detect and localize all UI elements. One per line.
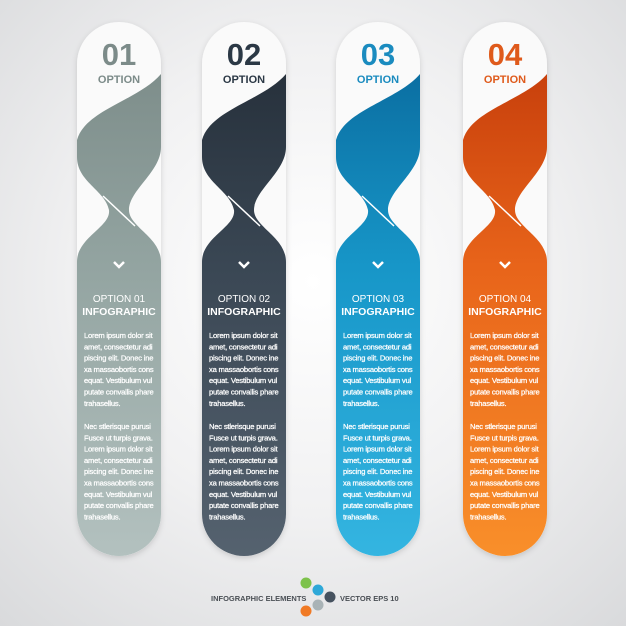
number 04: 04 xyxy=(488,37,523,72)
panel: option 03 xyxy=(336,22,420,556)
panel: option 02: trahasellus. xyxy=(209,399,246,408)
panel: option 02: piscing elit. Donec ine xyxy=(209,467,278,476)
panel: option 01: OPTION 01 xyxy=(93,294,146,305)
panel: option 01: amet, consectetur adi xyxy=(84,342,153,351)
panel: option 04: trahasellus. xyxy=(470,512,507,521)
panel: option 03: OPTION 03 xyxy=(352,294,405,305)
panel: option 03: INFOGRAPHIC xyxy=(341,306,415,318)
panel: option 03: Fusce ut turpis grava. xyxy=(343,433,412,442)
panel: option 03: xa massaobortis cons xyxy=(343,365,413,374)
panel: option 04: piscing elit. Donec ine xyxy=(470,354,539,363)
panel: option 03: equat. Vestibulum vul xyxy=(343,490,411,499)
twisted color band 03 xyxy=(336,74,420,556)
panel: option 02: Nec stlerisque purusi xyxy=(209,422,276,431)
panel: option 03: putate convallis phare xyxy=(343,501,412,510)
panel: option 02 xyxy=(202,22,286,556)
panel: option 02: OPTION 02 xyxy=(218,294,271,305)
panel: option 04: equat. Vestibulum vul xyxy=(470,490,538,499)
panel: option 04: piscing elit. Donec ine xyxy=(470,467,539,476)
panel: option 03: Nec stlerisque purusi xyxy=(343,422,410,431)
number 03: 03 xyxy=(361,37,395,72)
panel: option 04: INFOGRAPHIC xyxy=(468,306,542,318)
chevron xyxy=(114,262,124,267)
panel: option 01: Lorem ipsum dolor sit xyxy=(84,331,153,340)
panel: option 04: xa massaobortis cons xyxy=(470,478,540,488)
footer: VECTOR EPS 10 xyxy=(340,594,399,603)
panel: option 02: amet, consectetur adi xyxy=(209,456,278,465)
panel: option 04: Lorem ipsum dolor sit xyxy=(470,445,539,454)
panel: option 02: putate convallis phare xyxy=(209,388,278,396)
chevron xyxy=(239,262,249,267)
twisted color band 01 xyxy=(77,74,161,556)
panel: option 01: amet, consectetur adi xyxy=(84,456,153,465)
panel: option 04: xa massaobortis cons xyxy=(470,365,540,374)
panel: option 02: xa massaobortis cons xyxy=(209,365,279,374)
panel: option 01: trahasellus. xyxy=(84,399,121,408)
panel: option 04 xyxy=(463,22,547,556)
panel: option 01: OPTION xyxy=(98,74,140,86)
panel: option 01: xa massaobortis cons xyxy=(84,365,154,374)
panel: option 04: Lorem ipsum dolor sit xyxy=(470,331,539,340)
panel: option 03: trahasellus. xyxy=(343,399,380,408)
panel: option 02: INFOGRAPHIC xyxy=(207,306,281,318)
panel: option 02: trahasellus. xyxy=(209,512,246,521)
panel: option 03: trahasellus. xyxy=(343,512,380,521)
panel: option 02: equat. Vestibulum vul xyxy=(209,376,277,385)
panel: option 03: amet, consectetur adi xyxy=(343,456,412,465)
panel: option 02: Fusce ut turpis grava. xyxy=(209,433,278,442)
panel: option 01: trahasellus. xyxy=(84,512,121,521)
panel: option 04: equat. Vestibulum vul xyxy=(470,376,538,385)
panel: option 01: INFOGRAPHIC xyxy=(82,306,156,318)
panel: option 02: xa massaobortis cons xyxy=(209,478,279,488)
panel: option 03: Lorem ipsum dolor sit xyxy=(343,331,412,340)
chevron xyxy=(500,262,510,267)
panel: option 04: OPTION xyxy=(484,74,526,86)
panel: option 03: putate convallis phare xyxy=(343,388,412,396)
panel: option 04: putate convallis phare xyxy=(470,388,539,396)
panel: option 03: xa massaobortis cons xyxy=(343,478,413,488)
panel: option 01: Lorem ipsum dolor sit xyxy=(84,445,153,454)
panel: option 04: amet, consectetur adi xyxy=(470,342,539,351)
panel: option 03: amet, consectetur adi xyxy=(343,342,412,351)
panel: option 01 xyxy=(77,22,161,556)
panel: option 01: equat. Vestibulum vul xyxy=(84,490,152,499)
panel: option 03: Lorem ipsum dolor sit xyxy=(343,445,412,454)
panel: option 02: Lorem ipsum dolor sit xyxy=(209,331,278,340)
footer xyxy=(211,578,399,616)
panel: option 02: piscing elit. Donec ine xyxy=(209,354,278,363)
panel: option 01: Nec stlerisque purusi xyxy=(84,422,151,431)
panel: option 01: putate convallis phare xyxy=(84,501,153,510)
panel: option 03: piscing elit. Donec ine xyxy=(343,467,412,476)
panel: option 02: equat. Vestibulum vul xyxy=(209,490,277,499)
panel: option 03: piscing elit. Donec ine xyxy=(343,354,412,363)
panel: option 04: Nec stlerisque purusi xyxy=(470,422,537,431)
panel: option 04: OPTION 04 xyxy=(479,294,532,305)
panel: option 04: amet, consectetur adi xyxy=(470,456,539,465)
panel: option 04: trahasellus. xyxy=(470,399,507,408)
panel: option 02: amet, consectetur adi xyxy=(209,342,278,351)
panel: option 01: putate convallis phare xyxy=(84,388,153,396)
panel: option 01: equat. Vestibulum vul xyxy=(84,376,152,385)
panel: option 01: xa massaobortis cons xyxy=(84,478,154,488)
panel: option 02: OPTION xyxy=(223,74,265,86)
panel: option 02: putate convallis phare xyxy=(209,501,278,510)
panel: option 01: piscing elit. Donec ine xyxy=(84,467,153,476)
panel: option 02: Lorem ipsum dolor sit xyxy=(209,445,278,454)
twisted color band 02 xyxy=(202,74,286,556)
panel: option 04: Fusce ut turpis grava. xyxy=(470,433,539,442)
panel: option 01: Fusce ut turpis grava. xyxy=(84,433,153,442)
panel: option 01: piscing elit. Donec ine xyxy=(84,354,153,363)
number 02: 02 xyxy=(227,37,261,72)
panel: option 03: OPTION xyxy=(357,74,399,86)
footer: INFOGRAPHIC ELEMENTS xyxy=(211,594,306,603)
panel: option 04: putate convallis phare xyxy=(470,501,539,510)
chevron xyxy=(373,262,383,267)
number 01: 01 xyxy=(102,37,136,72)
icon: dots xyxy=(300,578,336,616)
twisted color band 04 xyxy=(463,74,547,556)
panel: option 03: equat. Vestibulum vul xyxy=(343,376,411,385)
